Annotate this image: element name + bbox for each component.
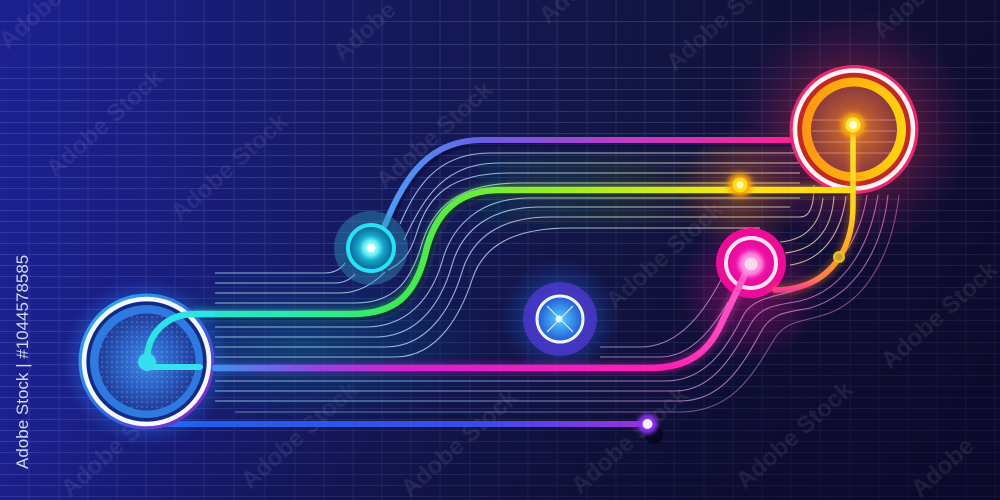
line: bottom blue to purple	[165, 421, 648, 427]
watermark: Adobe Stock	[371, 76, 499, 194]
dot: amber on curve	[833, 251, 845, 263]
magenta halo	[678, 218, 822, 362]
thin flow lines: upper set	[215, 153, 846, 357]
pink node hub	[739, 252, 763, 276]
orange halo	[731, 8, 975, 252]
dot: yellow on line	[728, 173, 752, 197]
dial hub	[138, 353, 156, 371]
node: large orange ring	[790, 65, 918, 194]
line: blue to magenta	[215, 264, 750, 368]
blue halo	[500, 258, 620, 378]
thin flow lines: lower set	[215, 195, 899, 412]
amber halo	[678, 128, 802, 252]
node: cyan	[334, 211, 408, 285]
watermark: Adobe Stock	[876, 256, 1000, 374]
node: star	[523, 282, 597, 356]
node: large blue dial	[70, 286, 222, 438]
dot: orange ring top	[841, 113, 865, 137]
endpoint: bottom line	[638, 414, 663, 444]
dial arc	[147, 314, 215, 358]
watermark: Adobe Stock	[731, 376, 859, 494]
watermark: Adobe Stock	[56, 384, 184, 500]
node: pink	[716, 228, 786, 298]
watermark: Adobe Stock	[236, 376, 364, 494]
watermark: Adobe Stock	[601, 196, 729, 314]
watermark: Adobe Stock	[166, 108, 294, 226]
teal wash behind lower flow lines	[90, 260, 510, 430]
watermark: Adobe Stock	[566, 381, 694, 499]
glow wash behind upper flow lines	[480, 158, 720, 224]
line: orange to pink	[775, 125, 853, 290]
line: teal to green to yellow	[195, 190, 857, 317]
watermark: Adobe Stock	[41, 64, 169, 182]
line: magenta horizontal run glow	[215, 264, 750, 368]
watermark: Adobe Stock	[396, 384, 524, 500]
dial needle	[147, 364, 200, 370]
green line segment over ring	[790, 187, 852, 193]
line: top blue to pink	[385, 140, 792, 228]
stock id: Adobe Stock | #1044578585	[13, 255, 32, 469]
